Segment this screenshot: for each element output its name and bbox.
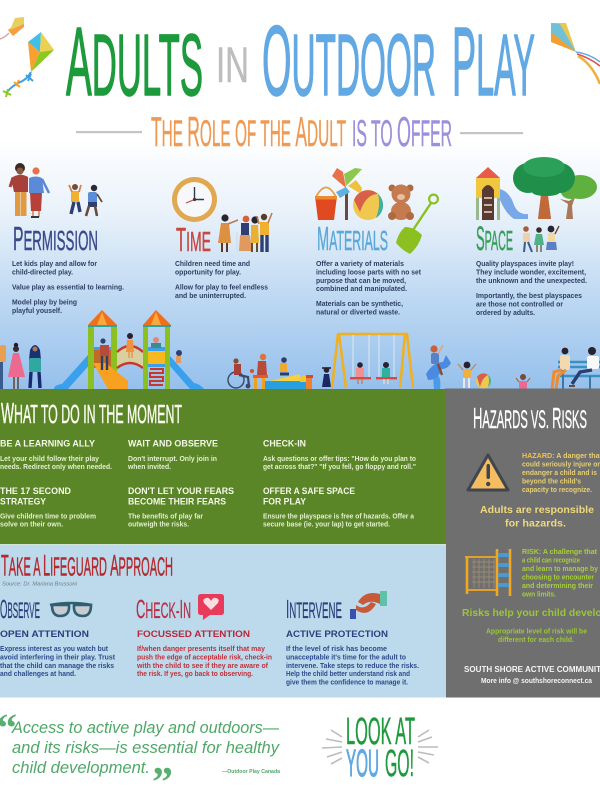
icon: play tower and slide [476,167,528,220]
panel: permission [10,163,124,315]
text: intervene body: give them the confidence to manage it. [286,678,408,686]
text: observe body: Express interest as you watch but [0,644,108,653]
quote text: child development. [12,758,150,777]
structure: bridge [117,346,143,368]
item: be a learning ally: Let your child follow their play [0,454,100,463]
item: wait and observe: Don't interrupt. Only join in [128,454,217,463]
text: risk definition: and determining their [522,581,593,590]
item: 17 second strategy: Give children time to problem [0,512,96,520]
logo: look at you go: YOU [346,743,379,785]
logo: look at you go: LOOK AT [346,711,415,753]
text: check-in body: push the edge of acceptable risk, check-in [137,652,272,662]
panel: what to do in the moment [0,389,446,544]
item: safe space: Ensure the playspace is free of hazards. Offer a [263,512,415,520]
text: risk definition [522,547,599,598]
icon: large tree [513,157,575,219]
callout: adults are responsible: for hazards. [505,518,566,530]
sky background [0,140,600,390]
icon: climbing net [465,549,510,596]
subheading: focussed attention: FOCUSSED ATTENTION [137,629,250,640]
item: fears: DON'T LET YOUR FEARS [128,486,234,496]
text: hazard definition: beyond the child's [522,476,581,486]
item: 17 second strategy: solve on their own. [0,520,63,528]
text: hazard definition [522,451,600,494]
item: fears [128,486,234,528]
quote text [11,718,281,777]
icon: helping hands [350,591,387,619]
item: wait and observe [127,438,218,471]
item: be a learning ally [0,438,112,471]
column: intervene: INTERVENE [286,594,342,624]
subtitle: purple part: IS TO OFFER [352,108,452,155]
text: permission body: Model play by being [12,298,77,306]
text: intervene body: If the level of risk has become [286,644,388,653]
children: on structure [100,333,182,370]
structure: left tower [88,310,128,389]
quote text: Access to active play and outdoors— [11,718,279,737]
logo: look at you go: GO! [385,743,414,785]
icon: kite left [3,32,54,97]
text: materials body: including loose parts with no set [316,268,421,276]
text: time body: and be uninterrupted. [175,291,246,300]
column: observe [0,594,115,678]
text: check-in body: with the child to see if they are aware of [136,661,268,670]
title: in: IN [216,37,249,93]
panel: space: SPACE [476,220,513,258]
item: wait and observe: WAIT AND OBSERVE [128,438,218,448]
item: check-in tips: get across that?" "If you fell, go floppy and roll." [263,462,416,471]
text: space body: Quality playspaces invite play! [476,259,574,268]
heading: time: TIME [176,221,211,258]
children: wheelchair and sand play [228,354,313,389]
text: time body: opportunity for play. [175,268,241,276]
heading: check-in: CHECK-IN [136,594,191,624]
icon: warning triangle [468,455,508,490]
title: ADULTS [66,7,203,116]
item: check-in tips: CHECK-IN [263,438,306,448]
panel: what to do in the moment: WHAT TO DO IN THE MOMENT [1,398,182,430]
callout: adults are responsible: Adults are responsible [480,505,594,516]
logo rays [322,730,438,764]
heading: lifeguard: TAKE A LIFEGUARD APPROACH [1,550,173,582]
text: materials body: combined and manipulated. [316,284,407,293]
icon: heart speech bubble [198,594,224,620]
item: 17 second strategy [0,486,96,528]
text: permission body: child-directed play. [12,268,73,276]
text: time body [175,259,268,300]
column: observe: OBSERVE [0,594,40,624]
icon: group of children [218,213,272,252]
text: time body: Allow for play to feel endless [175,282,268,292]
subtitle [76,108,523,155]
item: safe space: secure base (ie. your lap) to get started. [263,520,390,528]
structure: swing set [332,334,413,388]
structure: right tower [143,310,171,389]
panel: time [172,177,272,300]
quote text: and its risks—is essential for healthy [12,738,281,757]
women on bench [552,347,600,389]
text: materials body [316,259,421,316]
text: risk definition: own limits. [522,590,556,598]
panel: hazards vs risks [446,390,600,698]
item: safe space [263,486,415,528]
item: wait and observe: when invited. [127,462,171,471]
icon: beach ball [353,190,383,220]
structure: right slide [170,356,204,389]
icon: small tree [560,175,597,219]
icon: glasses [50,603,92,616]
item: check-in tips: Ask questions or offer tips: "How do you plan to [263,454,416,463]
panel: materials [315,168,438,316]
text: space body: ordered by adults. [476,308,535,317]
text: appropriate level [486,626,588,644]
column: intervene [286,591,419,686]
text: space body: Importantly, the best playspaces [476,291,582,300]
text: time body: Children need time and [175,259,250,268]
text: intervene body: unacceptable it's time for the adult to [286,652,406,662]
text: permission body: Let kids play and allow for [12,259,97,268]
icon: partial kite top left [0,17,24,39]
text: materials body: Materials can be synthetic, [316,299,403,308]
subheading: active protection: ACTIVE PROTECTION [286,629,388,640]
icon: bucket [315,188,337,220]
text: check-in body [136,644,272,678]
text: observe body: and challenges at hand. [0,669,76,678]
icon: pinwheel [332,168,362,220]
item: check-in tips [263,438,416,471]
item: safe space: OFFER A SAFE SPACE [263,486,355,496]
source note: Source: Dr. Mariana Brussoni [2,582,78,588]
item: safe space: FOR PLAY [263,496,306,506]
text: check-in body: the risk. If yes, go back to observing. [137,669,253,678]
text: check-in body: If/when danger presents itself that may [137,644,266,653]
item: 17 second strategy: THE 17 SECOND [0,486,71,496]
text: observe body: that the child can manage the risks [0,661,114,670]
icon: teddy bear [388,184,414,220]
structure: left slide [54,355,92,389]
text: intervene body [286,644,419,686]
footer: organisation [464,665,600,685]
item: fears: BECOME THEIR FEARS [128,496,226,506]
people: adults at left [0,343,41,389]
quote [0,705,281,800]
title [66,5,535,116]
text: space body [476,259,587,317]
subtitle: orange part: THE ROLE OF THE ADULT [151,108,346,155]
panel: lifeguard approach [0,544,446,698]
illustration: playground scene [0,310,600,390]
child with dark dress [322,367,331,387]
child and beach ball [458,362,491,388]
column: check-in [136,594,272,678]
child on spring horse [426,345,451,390]
icon: shovel [396,195,438,254]
text: materials body: natural or diverted waste. [316,308,400,316]
text: observe body: avoid interfering in their play. Trust [0,652,115,662]
text: materials body: purpose that can be moved, [316,276,406,285]
icon: three children [523,226,559,252]
text: permission body: Value play as essential to learning. [12,282,124,292]
footer: organisation: More info @ southshoreconnect.ca [481,676,593,685]
icon: two adults [10,163,49,218]
item: be a learning ally: BE A LEARNING ALLY [0,438,95,448]
text: observe body [0,644,115,678]
subheading: open attention: OPEN ATTENTION [0,629,89,640]
icon: two children [69,184,102,216]
logo: look at you go [322,711,438,785]
text: intervene body: intervene. Take steps to reduce the risks. [286,661,419,670]
panel: space [476,157,597,317]
text: permission body: playful youself. [12,306,62,315]
text: risk definition: a child can recognize [522,556,581,564]
item: fears: outweigh the risks. [128,520,189,528]
ground strip grey [445,388,600,392]
item: be a learning ally: needs. Redirect only when needed. [0,462,112,471]
text: space body: are those not controlled or [476,300,563,308]
heading: permission: PERMISSION [13,220,98,257]
icon: clock [172,177,217,222]
quote attribution: —Outdoor Play Canada [222,769,280,775]
text: appropriate level: different for each child. [498,635,574,644]
text: permission body [12,259,124,315]
text: space body: They include wonder, excitement, [476,268,586,276]
toddler [516,374,530,389]
item: fears: The benefits of play far [128,512,203,520]
text: materials body: Offer a variety of materials [316,259,404,268]
text: appropriate level: Appropriate level of risk will be [486,626,588,636]
item: 17 second strategy: STRATEGY [0,496,46,506]
panel: materials: MATERIALS [317,220,388,257]
text: hazard definition: capacity to recognize. [522,485,592,494]
text: intervene body: Help the child better understand risk and [286,669,410,678]
icon: kite right [551,23,600,84]
text: space body: the unknown and the unexpected. [476,276,587,285]
callout: adults are responsible [480,505,594,530]
